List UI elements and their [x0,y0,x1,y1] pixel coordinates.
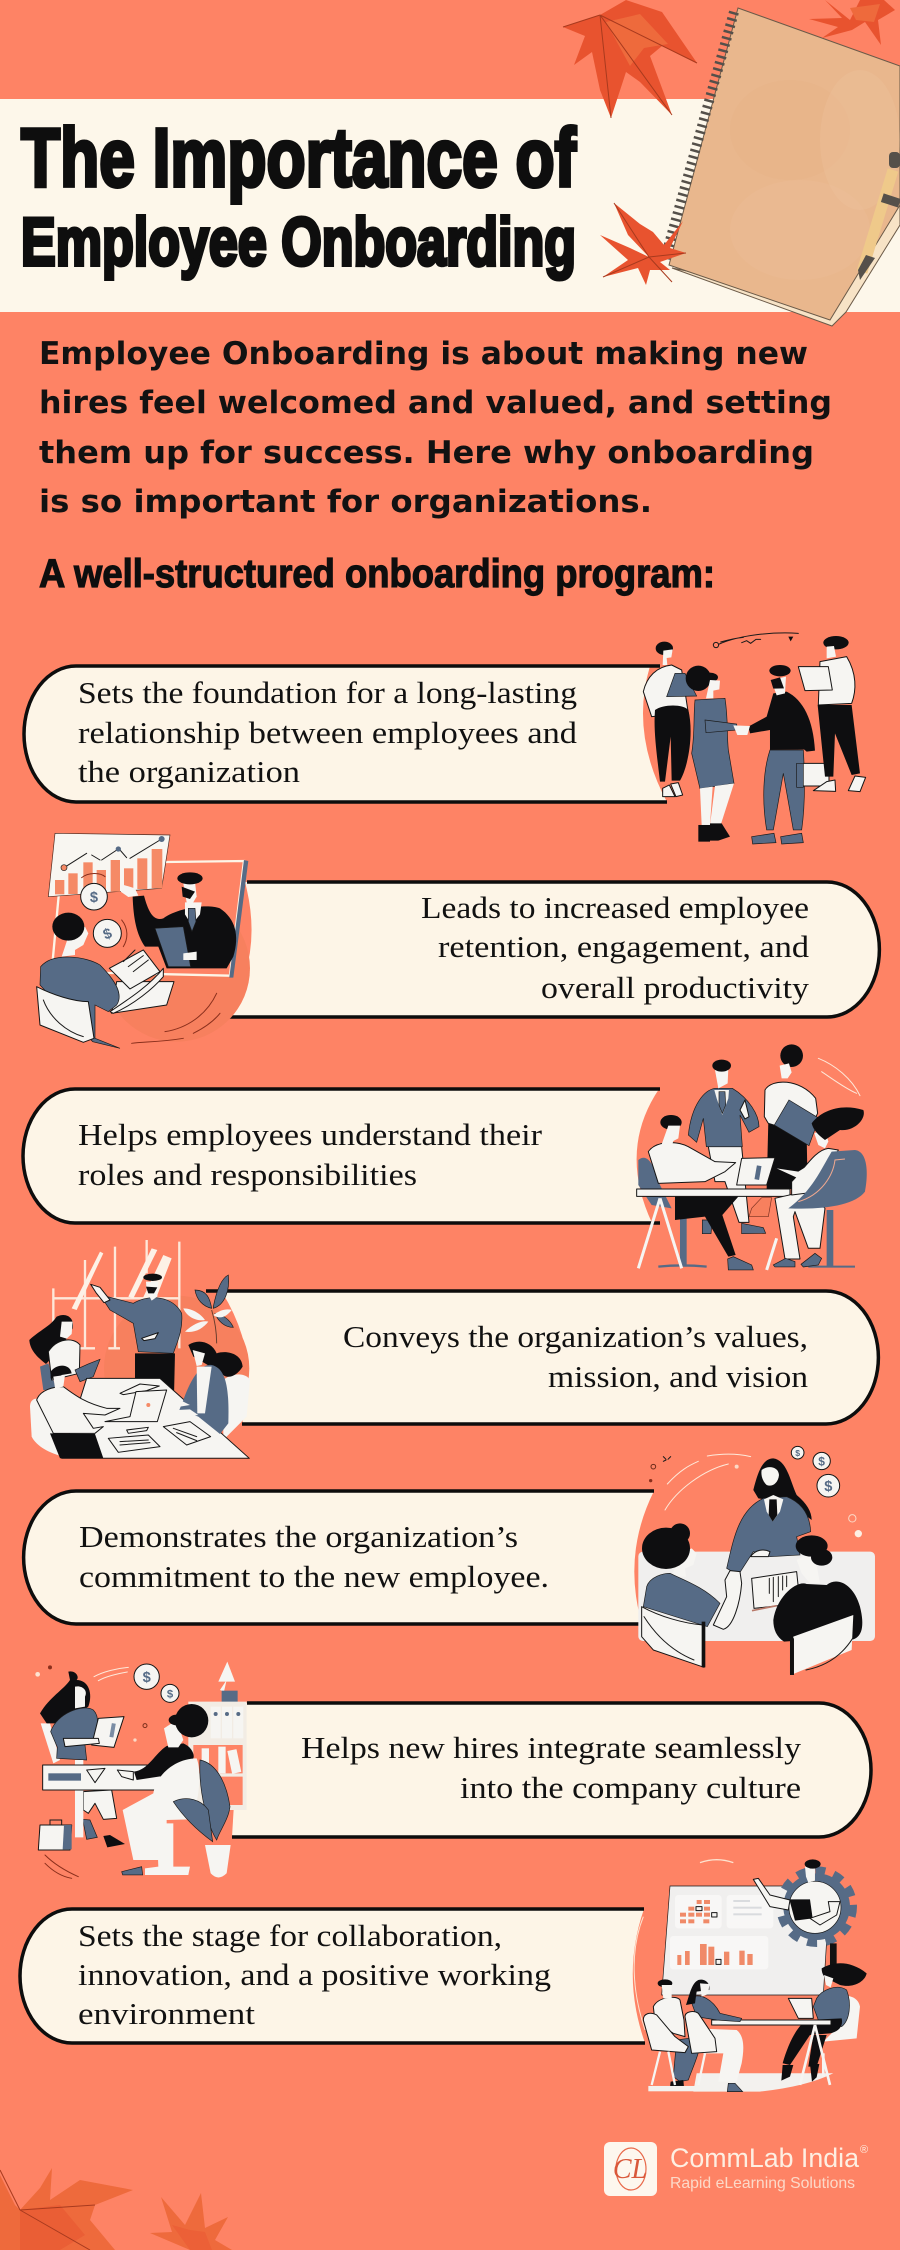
logo: CommLab India: CL [613,2154,647,2185]
panel 7: collaboration: innovation, and a positive working [78,1957,551,1992]
illustration: two women at a desk with shelf: $ [167,1688,174,1700]
panel 4: values [206,1291,878,1424]
panel 6: culture [232,1703,871,1837]
panel 3: roles [23,1089,660,1223]
intro paragraph: hires feel welcomed and valued, and setting [39,385,832,421]
panel 1: foundation: the organization [78,754,301,789]
panel 2: retention: overall productivity [541,970,810,1005]
icon: maple leaf top centre [563,0,697,118]
icon: maple leaf by notebook [600,203,686,285]
intro paragraph [39,336,832,520]
illustration: handshake across a desk: $ [824,1479,832,1495]
panel 5: commitment [24,1491,654,1624]
icon: maple leaf bottom centre [150,2193,232,2250]
panel 3: roles: Helps employees understand their [78,1117,543,1152]
illustration: team meeting around a table [637,1044,867,1270]
icon: maple leaf top right [809,0,895,45]
panel 7: collaboration [20,1909,645,2043]
panel 6: culture: Helps new hires integrate seamlessly [301,1730,802,1765]
intro paragraph: Employee Onboarding is about making new [39,336,808,372]
panel 1: foundation: Sets the foundation for a long-lasting [78,675,577,710]
panel 4: values: mission, and vision [548,1359,809,1394]
illustration: handshake across a desk [638,1446,875,1675]
illustration: four colleagues shaking hands [643,633,866,844]
title: The Importance of [21,111,576,204]
title: Employee Onboarding [21,204,576,280]
subheading: A well-structured onboarding program: [39,552,715,596]
panel 5: commitment: Demonstrates the organization’s [79,1519,518,1554]
panel 3: roles: roles and responsibilities [78,1157,417,1192]
illustration: two women at a desk with shelf [35,1662,247,1878]
logo: CommLab India: Rapid eLearning Solutions [670,2175,855,2192]
panel 2: retention: retention, engagement, and [438,929,810,964]
illustration: team at a boardroom table [29,1240,250,1458]
intro paragraph: them up for success. Here why onboarding [39,435,814,471]
panel 2: retention: Leads to increased employee [421,890,809,925]
panel 6: culture: into the company culture [460,1770,801,1805]
header band [0,99,900,312]
illustration: two women at a desk with shelf: $ [143,1670,151,1686]
logo: CommLab India [604,2142,868,2196]
illustration: presentation board with gear [634,1859,867,2092]
title [21,111,576,280]
illustration: presenter on screen with charts: $ [90,890,98,906]
logo: CommLab India: ® [860,2144,868,2156]
intro paragraph: is so important for organizations. [39,484,652,520]
panel 4: values: Conveys the organization’s values, [343,1319,808,1354]
illustration: handshake across a desk: $ [818,1454,825,1468]
panel 2: retention [224,882,879,1017]
panel 7: collaboration: Sets the stage for collaboration, [78,1918,502,1953]
panel 5: commitment: commitment to the new employee. [79,1559,549,1594]
illustration: presenter on screen with charts: $ [101,926,114,943]
icon: maple leaf bottom left [0,2168,133,2250]
icon: notebook with spiral and pen [664,8,900,326]
panel 7: collaboration: environment [78,1996,255,2031]
panel 1: foundation [24,666,667,802]
illustration: presenter on screen with charts [37,833,250,1048]
panel 1: foundation: relationship between employees and [78,715,578,750]
illustration: handshake across a desk: $ [795,1448,800,1458]
logo: CommLab India: CommLab India [670,2143,860,2173]
